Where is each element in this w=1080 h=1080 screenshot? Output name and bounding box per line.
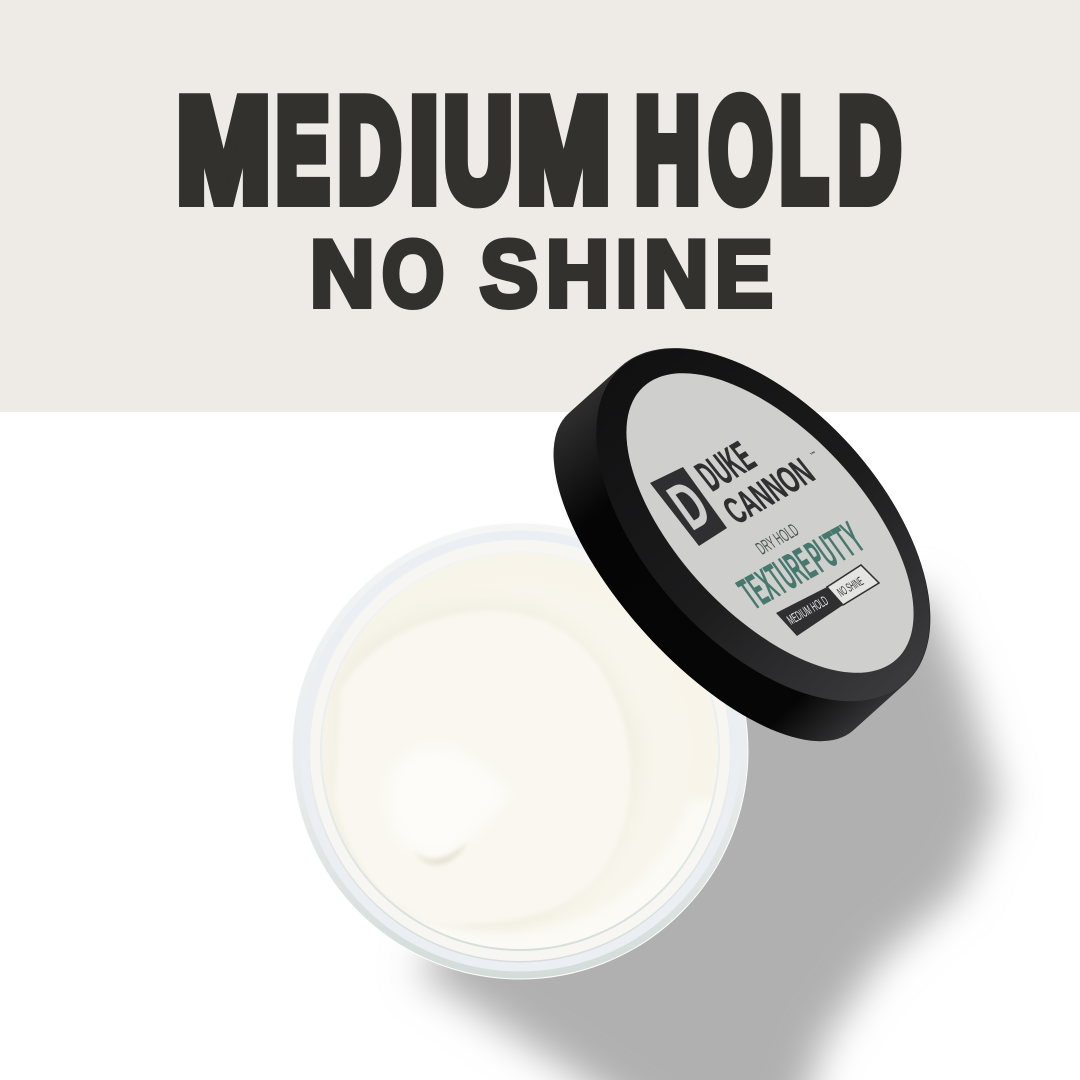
logo mark: D box: D <box>655 467 723 543</box>
logo text: CANNON <box>715 451 823 532</box>
heading: medium hold: U <box>444 69 512 231</box>
logo text <box>686 433 823 532</box>
heading: medium hold: M <box>177 69 270 231</box>
heading: medium hold <box>177 69 902 231</box>
top banner background <box>0 0 1080 412</box>
subheading: no shine: O <box>382 221 444 326</box>
heading: medium hold: D <box>338 69 400 231</box>
heading: medium hold: L <box>780 69 828 231</box>
lid label disc <box>576 324 964 722</box>
cream swirl <box>335 610 631 925</box>
hold badge: NO SHINE <box>834 574 866 599</box>
jar rim <box>292 523 748 979</box>
subheading: no shine: N <box>644 221 708 326</box>
lid <box>502 288 993 790</box>
subheading: no shine: H <box>546 221 609 326</box>
subheading: no shine: I <box>616 221 636 326</box>
hold badge: MEDIUM HOLD <box>784 593 831 627</box>
lid body and side wall <box>502 288 993 790</box>
cream dollop <box>396 756 494 847</box>
logo mark: D box <box>650 467 727 546</box>
logo text: DUKE <box>686 433 765 500</box>
cream surface <box>322 553 720 960</box>
heading: medium hold: O <box>709 69 772 231</box>
cast shadow <box>415 590 1000 1080</box>
product: open jar with cream <box>292 523 748 979</box>
heading: medium hold: E <box>276 69 329 231</box>
heading: medium hold: M <box>517 69 610 231</box>
subheading: no shine: E <box>714 221 772 326</box>
heading: medium hold: D <box>838 69 901 231</box>
product name: DRY HOLD <box>752 521 803 559</box>
product name <box>730 513 873 619</box>
subheading: no shine: N <box>310 221 374 326</box>
heading: medium hold: I <box>410 69 438 231</box>
subheading: no shine: S <box>480 221 538 326</box>
lid top ring <box>533 288 993 762</box>
logo text: ™ <box>809 450 818 459</box>
heading: medium hold: H <box>635 69 700 231</box>
subheading: no shine <box>310 221 772 326</box>
